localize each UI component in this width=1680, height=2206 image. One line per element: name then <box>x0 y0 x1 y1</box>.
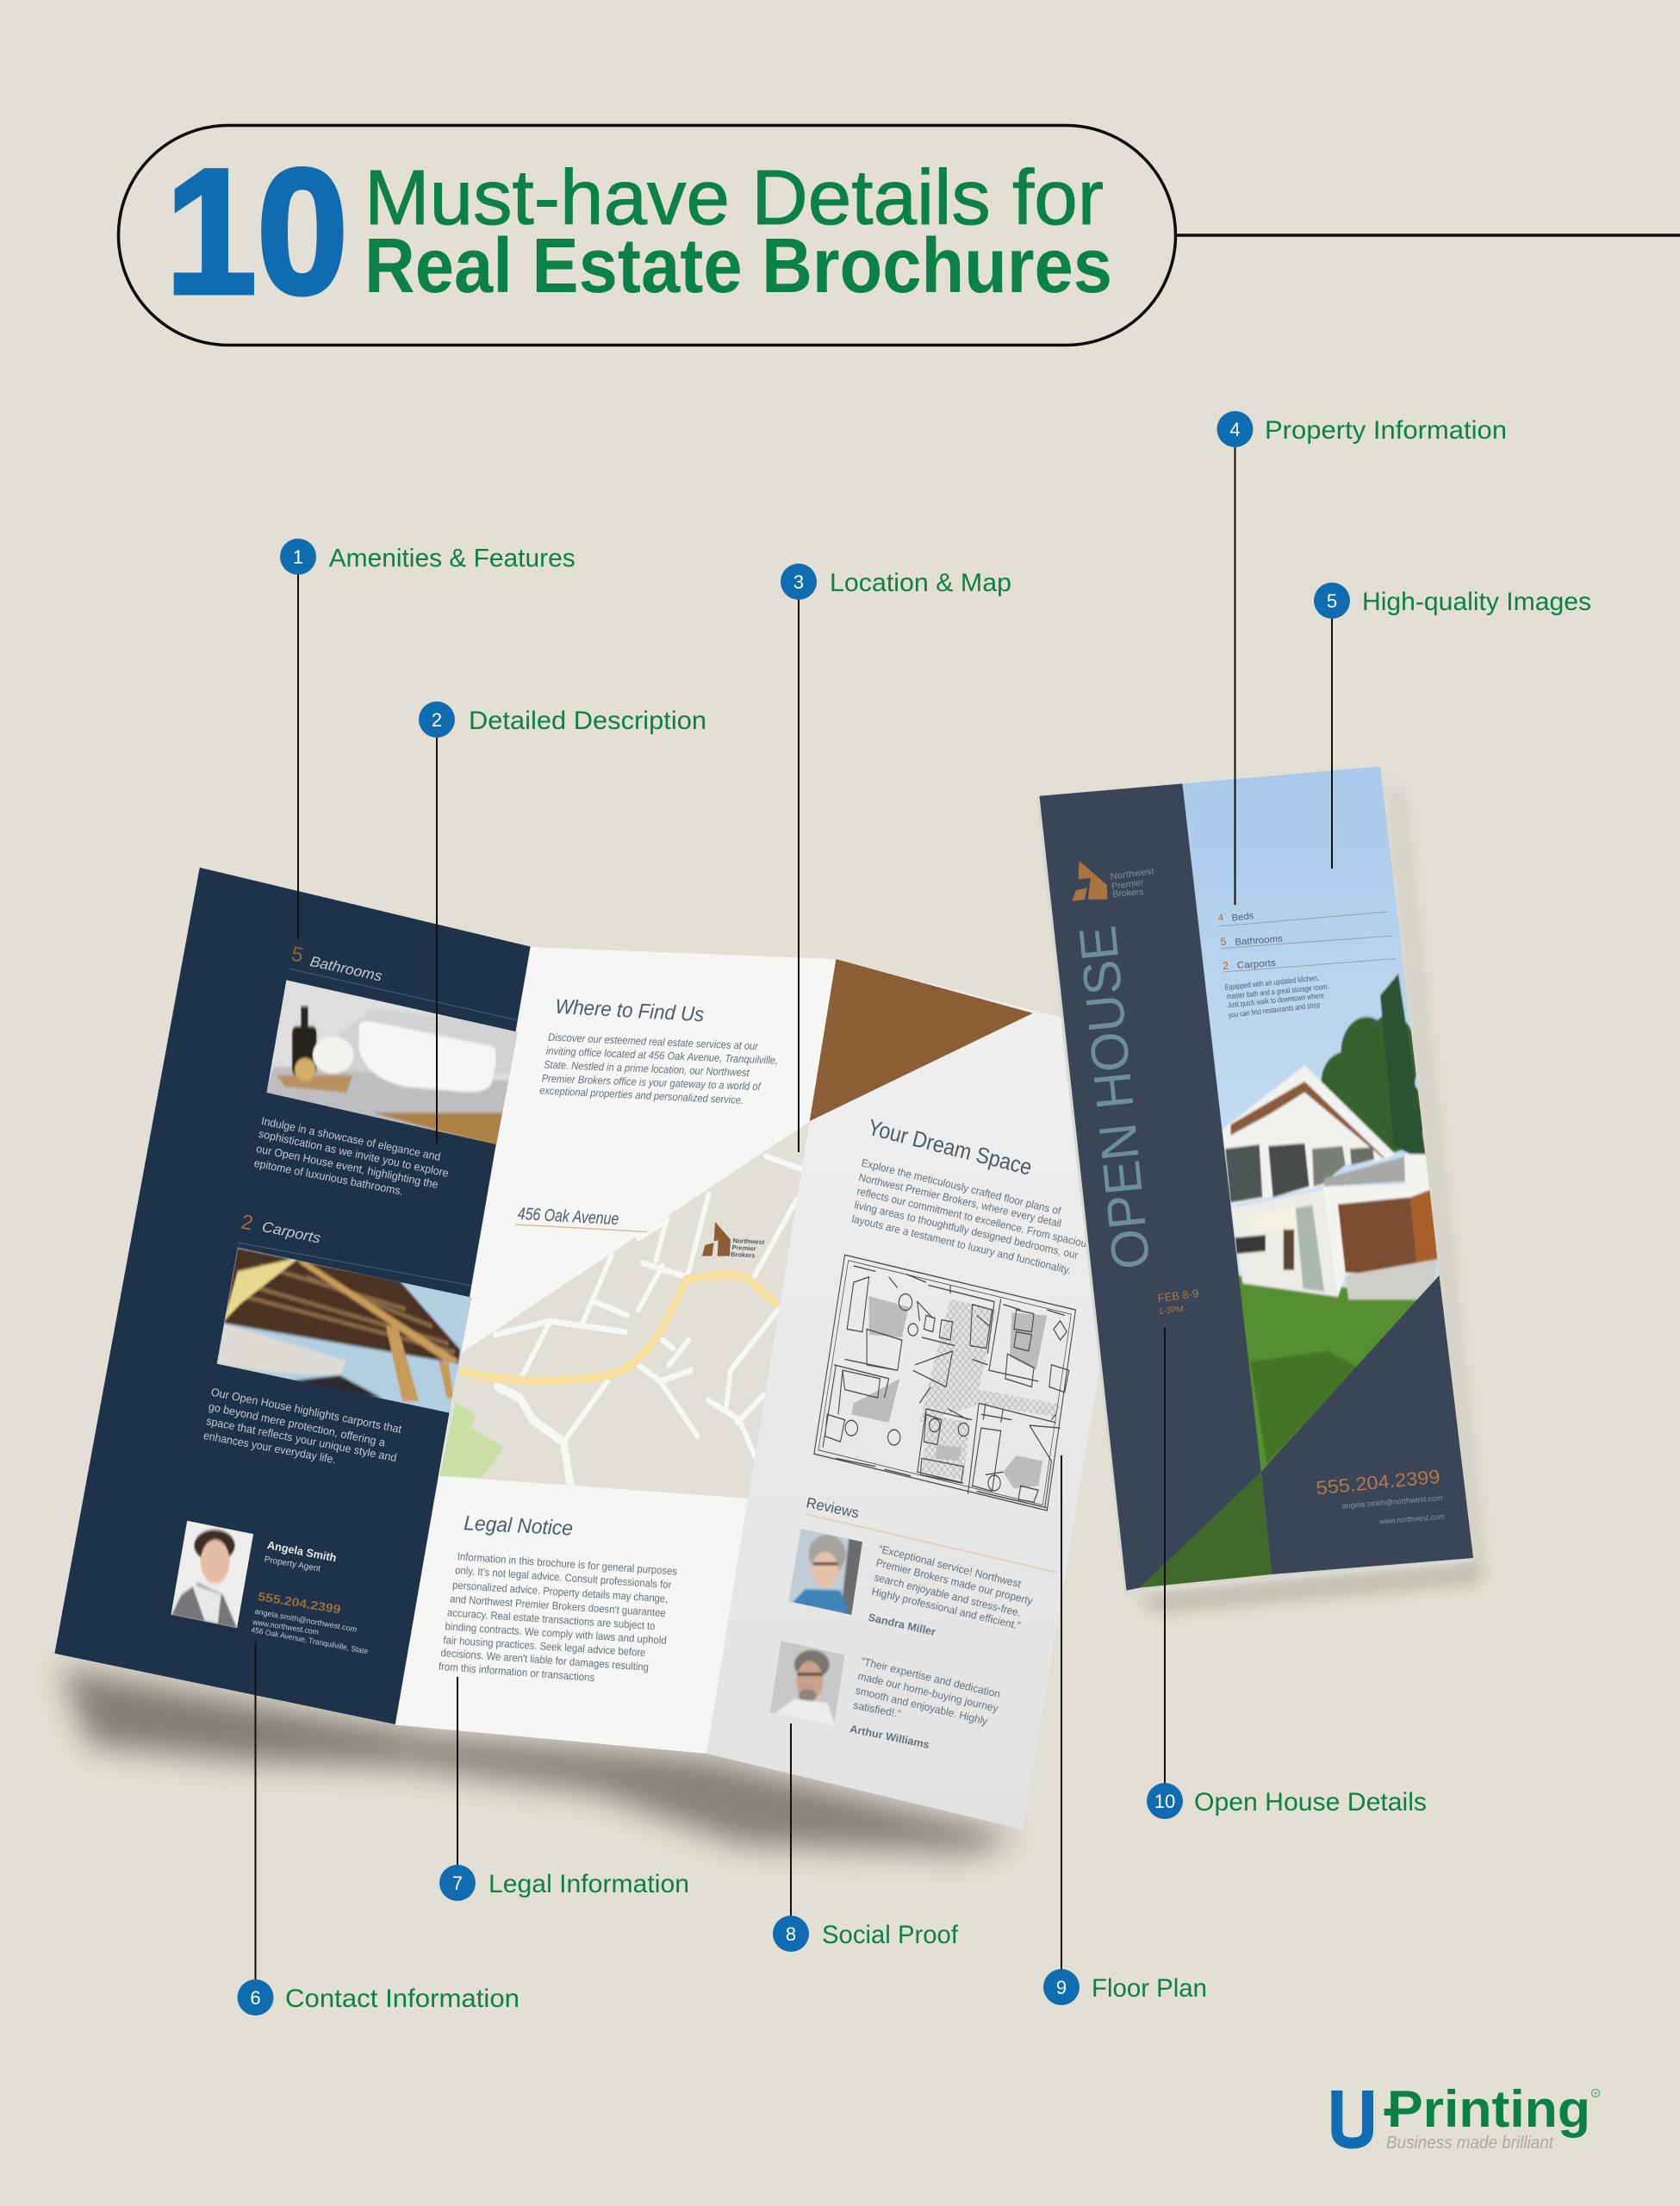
text: cover logo name <box>1110 866 1154 900</box>
big number: 10 <box>165 132 348 331</box>
text: property information: Equipped with an updated kitchen, <box>1224 974 1319 992</box>
callout 3: location and map <box>781 564 1011 1152</box>
text: carport copy: go beyond mere protection, offering a <box>208 1399 387 1449</box>
callout 7: legal information <box>439 1677 689 1901</box>
text: review two: “Their expertise and dedication <box>860 1655 1002 1700</box>
text: review one: “Exceptional service! Northwest <box>877 1542 1023 1590</box>
callout 10: open house details: Open House Details <box>1194 1788 1427 1817</box>
text: bathroom copy <box>253 1114 450 1198</box>
shadows under brochures <box>60 776 1484 1853</box>
text: property information: Beds <box>1231 911 1254 924</box>
callout 5: high quality images: 5 <box>1327 590 1337 612</box>
tagline: Business made brilliant <box>1386 2134 1554 2153</box>
text: bathroom copy: our Open House event, highlighting the <box>255 1142 439 1191</box>
text: review two: made our home-buying journey <box>856 1670 1000 1715</box>
connector rule <box>1175 234 1680 237</box>
callout 8: social proof: Social Proof <box>822 1921 959 1949</box>
callout 3: location and map: 3 <box>793 571 804 593</box>
text: bathroom copy: sophistication as we invite you to explore <box>258 1127 450 1180</box>
panel: middle location panel <box>395 947 836 1754</box>
text: property information: 5 <box>1220 935 1227 948</box>
text: legal copy: Information in this brochure is for general purposes <box>457 1550 677 1578</box>
heading: carports <box>238 1210 472 1286</box>
text: agent contact: angela.smith@northwest.com <box>254 1607 358 1634</box>
heading: carports: 2 <box>240 1210 255 1236</box>
text: agent contact: Angela Smith <box>266 1538 338 1564</box>
panel: left navy panel <box>54 868 531 1724</box>
heading: reviews: Reviews <box>805 1494 861 1522</box>
text: carport copy <box>202 1386 403 1466</box>
heading: where to find us: Where to Find Us <box>555 995 705 1026</box>
grass <box>1236 1275 1430 1474</box>
registered mark <box>1592 2089 1599 2097</box>
text: property information: 4 <box>1217 913 1224 924</box>
callout 10: open house details: 10 <box>1154 1791 1175 1812</box>
text: bathroom copy: Indulge in a showcase of elegance and <box>260 1114 442 1163</box>
text: legal copy: binding contracts. We comply with laws and uphold <box>445 1620 667 1647</box>
text: legal copy: from this information or transactions <box>438 1661 595 1684</box>
title line 2: Real Estate Brochures <box>364 223 1112 309</box>
text: review two: satisfied!.” <box>852 1699 902 1720</box>
text: floor plan intro: layouts are a testament to luxury and functionality. <box>850 1212 1072 1276</box>
photo: house <box>1176 758 1448 1480</box>
text: bathroom copy: epitome of luxurious bathrooms. <box>253 1156 404 1198</box>
text: legal copy: fair housing practices. Seek legal advice before <box>443 1634 646 1659</box>
photo: bathroom sink <box>261 975 525 1148</box>
text: map logo name: Premier <box>731 1243 756 1252</box>
text: location intro: State. Nestled in a prime location, our Northwest <box>544 1059 750 1079</box>
heading: bathrooms: Bathrooms <box>308 953 384 985</box>
text: review one: Premier Brokers made our property <box>874 1556 1035 1607</box>
callout 6: contact information: Contact Information <box>285 1985 520 2013</box>
text: property information: Carports <box>1236 958 1277 971</box>
photo: carport <box>217 1248 472 1413</box>
text: legal copy: accuracy. Real estate transactions are subject to <box>447 1606 656 1632</box>
photo: reviewer man <box>770 1641 844 1725</box>
text: location intro: exceptional properties and personalized service. <box>539 1084 744 1106</box>
garage <box>1322 1184 1438 1297</box>
text: cover contact: 555.204.2399 <box>1315 1466 1441 1499</box>
panel: right floor plan panel <box>706 959 1099 1829</box>
text: property information: Just quick walk to downtown where <box>1227 991 1324 1009</box>
text: map logo name: Brokers <box>731 1250 756 1259</box>
callout 1: amenities and features <box>280 539 576 939</box>
text: agent contact: 555.204.2399 <box>257 1589 342 1617</box>
text: review two: Arthur Williams <box>849 1723 930 1751</box>
upper wall <box>1223 1093 1384 1206</box>
photo: reviewer woman <box>789 1529 862 1615</box>
grass triangle <box>1140 1472 1272 1587</box>
brown triangle <box>810 959 1033 1121</box>
callout 3: location and map: Location & Map <box>830 569 1011 597</box>
logo: UPrinting <box>1337 2080 1599 2153</box>
text: agent contact: www.northwest.com <box>252 1617 320 1636</box>
heading: bathrooms: 5 <box>289 942 305 968</box>
icon: cover logo <box>1072 861 1107 901</box>
roof <box>1222 1065 1396 1160</box>
P crossbar <box>1384 2109 1397 2116</box>
heading: address: 456 Oak Avenue <box>517 1205 619 1229</box>
text: floor plan intro: reflects our commitment to excellence. From spacious <box>856 1185 1092 1251</box>
text: cover contact: www.northwest.com <box>1378 1511 1445 1526</box>
callout 7: legal information: Legal Information <box>488 1870 689 1898</box>
callout 6: contact information: 6 <box>250 1987 261 2009</box>
cover paper edge <box>1036 796 1474 1594</box>
callout 4: property information <box>1216 411 1507 905</box>
callout 9: floor plan: 9 <box>1056 1977 1067 1998</box>
text: agent contact: Property Agent <box>264 1555 321 1574</box>
text: review two <box>849 1655 1002 1751</box>
text: floor plan intro <box>850 1156 1092 1276</box>
text: review one: Highly professional and efficient.” <box>870 1586 1022 1632</box>
callout 7: legal information: 7 <box>452 1873 463 1894</box>
text: carport copy: enhances your everyday life. <box>202 1429 337 1466</box>
callout 5: high quality images: High-quality Images <box>1362 588 1591 616</box>
text: open house date <box>1157 1287 1199 1317</box>
heading: open house: OPEN HOUSE <box>1067 923 1160 1272</box>
callout 1: amenities and features: Amenities & Features <box>329 544 576 572</box>
map <box>432 1118 818 1502</box>
text: cover logo name: Northwest <box>1110 866 1154 882</box>
callout 8: social proof: 8 <box>786 1923 796 1945</box>
callout 9: floor plan: Floor Plan <box>1092 1974 1207 2003</box>
panel: cover lower right <box>1261 1275 1473 1574</box>
open brochure <box>54 868 1154 1829</box>
title line 1: Must-have Details for <box>364 155 1104 241</box>
heading: carports: Carports <box>260 1218 322 1247</box>
callout 6: contact information <box>238 1642 520 2016</box>
text: agent contact: 456 Oak Avenue, Tranquilville, State <box>251 1625 369 1655</box>
wordmark: Printing <box>1387 2080 1590 2138</box>
title banner <box>119 126 1680 345</box>
text: floor plan intro: Northwest Premier Brokers, where every detail <box>857 1171 1062 1230</box>
text: legal copy: and Northwest Premier Brokers doesn't guarantee <box>450 1592 666 1619</box>
text: legal copy: only. It's not legal advice. Consult professionals for <box>455 1564 672 1591</box>
callout 1: amenities and features: 1 <box>293 546 303 568</box>
text: legal copy <box>438 1550 677 1684</box>
text: open house date: FEB 8-9 <box>1157 1287 1199 1305</box>
text: review one: search enjoyable and stress-free. <box>873 1571 1023 1619</box>
heading: legal notice: Legal Notice <box>464 1511 574 1541</box>
icon: U mark <box>1337 2091 1368 2143</box>
text: review two: smooth and enjoyable. Highly <box>855 1685 989 1728</box>
trees <box>1322 974 1427 1162</box>
panel: cover left band <box>1039 783 1261 1591</box>
text: cover logo name: Brokers <box>1112 887 1144 900</box>
text: location intro: Premier Brokers office is your gateway to a world of <box>541 1072 762 1093</box>
heading: your dream space: Your Dream Space <box>866 1114 1035 1181</box>
text: legal copy: personalized advice. Property details may change, <box>452 1579 669 1605</box>
lower wall <box>1230 1189 1338 1297</box>
text: location intro: inviting office located at 456 Oak Avenue, Tranquilville, <box>546 1045 778 1067</box>
callout 4: property information: Property Information <box>1265 416 1507 445</box>
callout 2: detailed description: 2 <box>432 709 442 731</box>
cover brochure <box>1036 758 1474 1594</box>
text: map logo name <box>731 1237 765 1259</box>
callout 4: property information: 4 <box>1229 419 1241 440</box>
heading: bathrooms <box>289 942 518 1020</box>
pill outline <box>119 126 1175 345</box>
text: location intro <box>539 1031 778 1106</box>
callout 10: open house details <box>1147 1328 1427 1819</box>
text: floor plan intro: Explore the meticulously crafted floor plans of <box>860 1156 1062 1218</box>
callout 9: floor plan <box>1043 1455 1207 2005</box>
text: property information: master bath and a great storage room. <box>1226 982 1329 1000</box>
text: property information <box>1217 911 1396 1019</box>
text: map logo name: Northwest <box>732 1237 765 1246</box>
text: location intro: Discover our esteemed real estate services at our <box>548 1031 759 1052</box>
callout 2: detailed description <box>419 701 706 1144</box>
floor plan <box>814 1255 1075 1511</box>
icon: map logo <box>702 1222 731 1256</box>
text: review one: Sandra Miller <box>867 1611 937 1638</box>
text: review one <box>867 1542 1035 1638</box>
text: cover contact: angela.smith@northwest.com <box>1341 1493 1443 1511</box>
callout 5: high quality images <box>1314 583 1591 869</box>
heading: reviews <box>805 1494 1058 1573</box>
text: open house date: 1-3PM <box>1158 1305 1184 1317</box>
callout 2: detailed description: Detailed Description <box>469 707 706 735</box>
text: cover logo name: Premier <box>1111 877 1145 892</box>
photo: agent portrait <box>171 1520 253 1629</box>
text: property information: you can find restaurants and shop <box>1228 1000 1321 1019</box>
text: property information: 2 <box>1223 959 1229 972</box>
text: floor plan intro: living areas to thoughtfully designed bedrooms, our <box>853 1199 1080 1262</box>
text: cover contact <box>1315 1466 1445 1526</box>
text: agent contact <box>251 1538 369 1655</box>
text: carport copy: space that reflects your unique style and <box>205 1414 398 1464</box>
text: carport copy: Our Open House highlights carports that <box>210 1386 403 1436</box>
callout 8: social proof <box>773 1723 959 1952</box>
text: legal copy: decisions. We aren't liable for damages resulting <box>440 1647 649 1673</box>
text: property information: Bathrooms <box>1235 934 1284 948</box>
